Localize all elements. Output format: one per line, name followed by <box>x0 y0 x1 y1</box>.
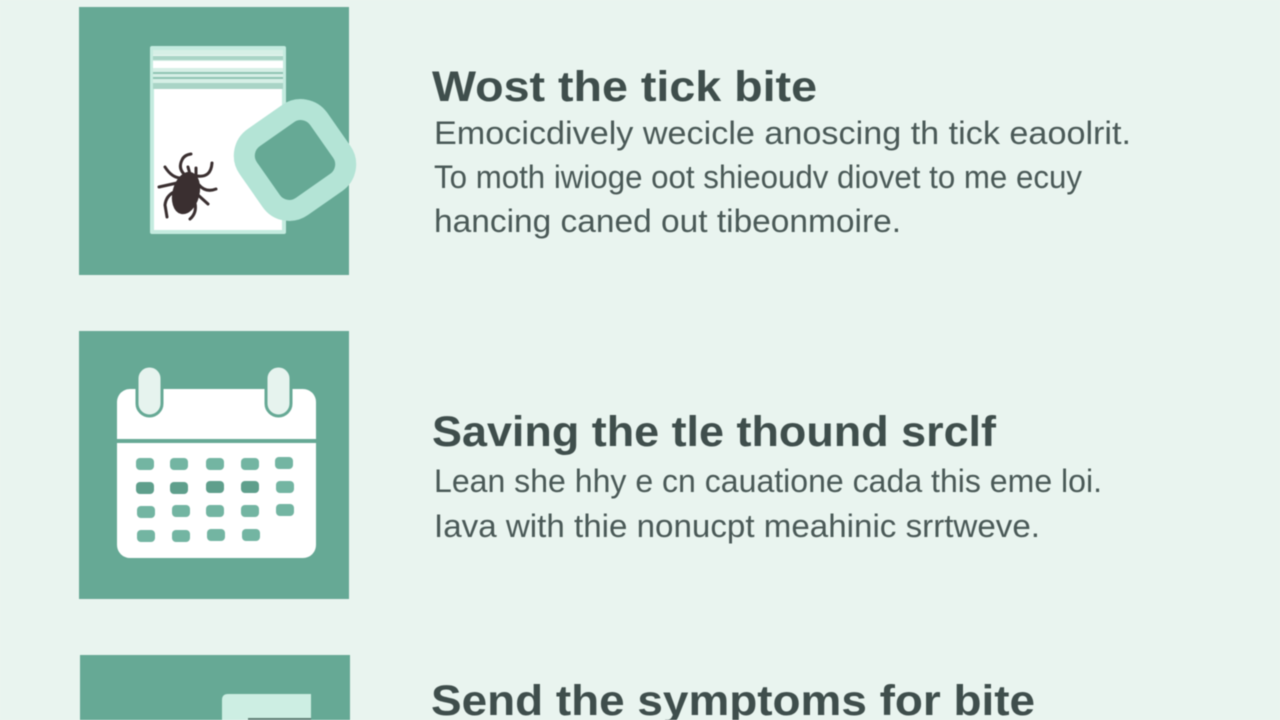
panel: symptoms icon <box>80 655 350 720</box>
icon: zip bag <box>150 46 286 234</box>
text block: step one: hancing caned out tibeonmoire. <box>434 203 901 239</box>
text block: step one <box>434 115 1131 239</box>
panel: tick in bag icon <box>79 7 354 275</box>
icon: calendar rings <box>137 366 291 416</box>
icon: symptoms document top <box>222 694 311 720</box>
calendar day grid <box>136 457 294 542</box>
text block: step two <box>434 463 1102 544</box>
panel: calendar icon <box>79 331 349 599</box>
text block: step two: Lean she hhy e cn cauatione cada this eme loi. <box>434 463 1102 499</box>
text block: step two: Iava with thie nonucpt meahinic srrtweve. <box>434 508 1040 544</box>
heading: step one: Wost the tick bite <box>432 63 817 111</box>
icon: calendar <box>117 366 316 558</box>
icon: tick <box>159 154 216 219</box>
text block: step one: To moth iwioge oot shieoudv diovet to me ecuy <box>434 159 1082 195</box>
text block: step one: Emocicdively wecicle anoscing th tick eaoolrit. <box>434 115 1131 151</box>
heading: step two: Saving the tle thound srclf <box>432 408 997 456</box>
icon: rounded square ring <box>236 101 354 219</box>
